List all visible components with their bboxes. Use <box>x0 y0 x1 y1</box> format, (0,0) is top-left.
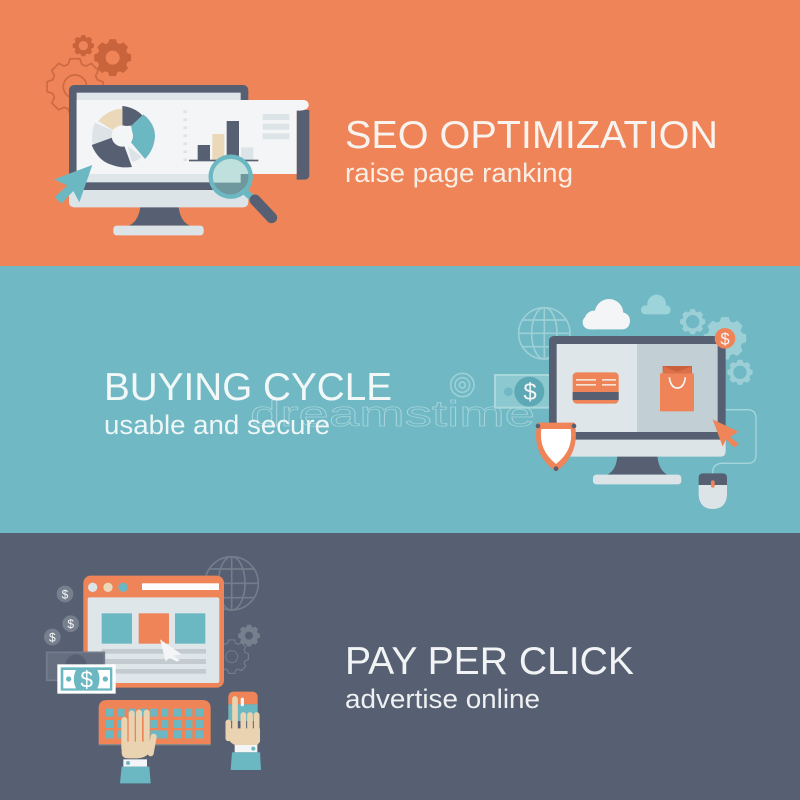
illustration: online shop monitor <box>451 295 756 509</box>
subheading: advertise online: advertise online <box>345 684 540 714</box>
wire <box>713 410 756 480</box>
icon: dollar coins <box>44 586 79 645</box>
icon: gears <box>47 35 131 115</box>
bar chart <box>183 110 289 161</box>
illustration: monitor with analytics <box>47 35 309 235</box>
icon: clouds <box>583 295 671 329</box>
illustration: browser, money and hands <box>44 557 261 783</box>
heading: buying cycle: BUYING CYCLE <box>104 366 392 409</box>
icon: dollar coin: $ <box>720 329 730 348</box>
icon: cursor arrow <box>713 419 739 447</box>
icon: globe <box>205 557 258 610</box>
icon: dollar coins: $ <box>49 630 56 644</box>
monitor <box>69 85 248 235</box>
icon: gears <box>680 309 753 385</box>
panel: buying cycle <box>0 266 800 533</box>
icon: shield <box>536 423 576 471</box>
icon: front banknote <box>57 664 116 694</box>
magnifying glass <box>211 157 272 218</box>
icon: spiral logo <box>451 373 474 397</box>
icon: mouse <box>699 473 727 509</box>
left hand <box>120 713 154 783</box>
keyboard <box>99 700 211 745</box>
mouse and right hand <box>227 692 261 770</box>
subheading: raise page ranking: raise page ranking <box>345 158 573 188</box>
icon: banknote: $ <box>523 379 537 406</box>
subheading: usable and secure: usable and secure <box>104 410 330 440</box>
icon: cursor arrow <box>54 165 92 204</box>
watermark: dreamstime <box>250 393 535 434</box>
monitor <box>549 336 726 484</box>
icon: banknote <box>495 375 552 408</box>
icon: gears <box>215 625 260 673</box>
icon: shopping bag <box>660 366 694 411</box>
icon: dollar coins: $ <box>62 587 69 601</box>
pie chart <box>92 106 155 167</box>
heading: pay per click: PAY PER CLICK <box>345 640 634 683</box>
icon: dollar coin <box>715 328 735 349</box>
icon: credit card <box>573 372 619 404</box>
heading: SEO optimization: SEO OPTIMIZATION <box>345 114 718 157</box>
icon: globe <box>519 308 570 359</box>
icon: back banknote <box>47 652 104 680</box>
browser window <box>83 576 224 688</box>
panel: SEO optimization <box>0 0 800 266</box>
icon: dollar coins: $ <box>67 617 74 631</box>
report sheet <box>77 100 309 180</box>
icon: front banknote: $ <box>80 667 93 693</box>
panel: pay per click <box>0 533 800 800</box>
